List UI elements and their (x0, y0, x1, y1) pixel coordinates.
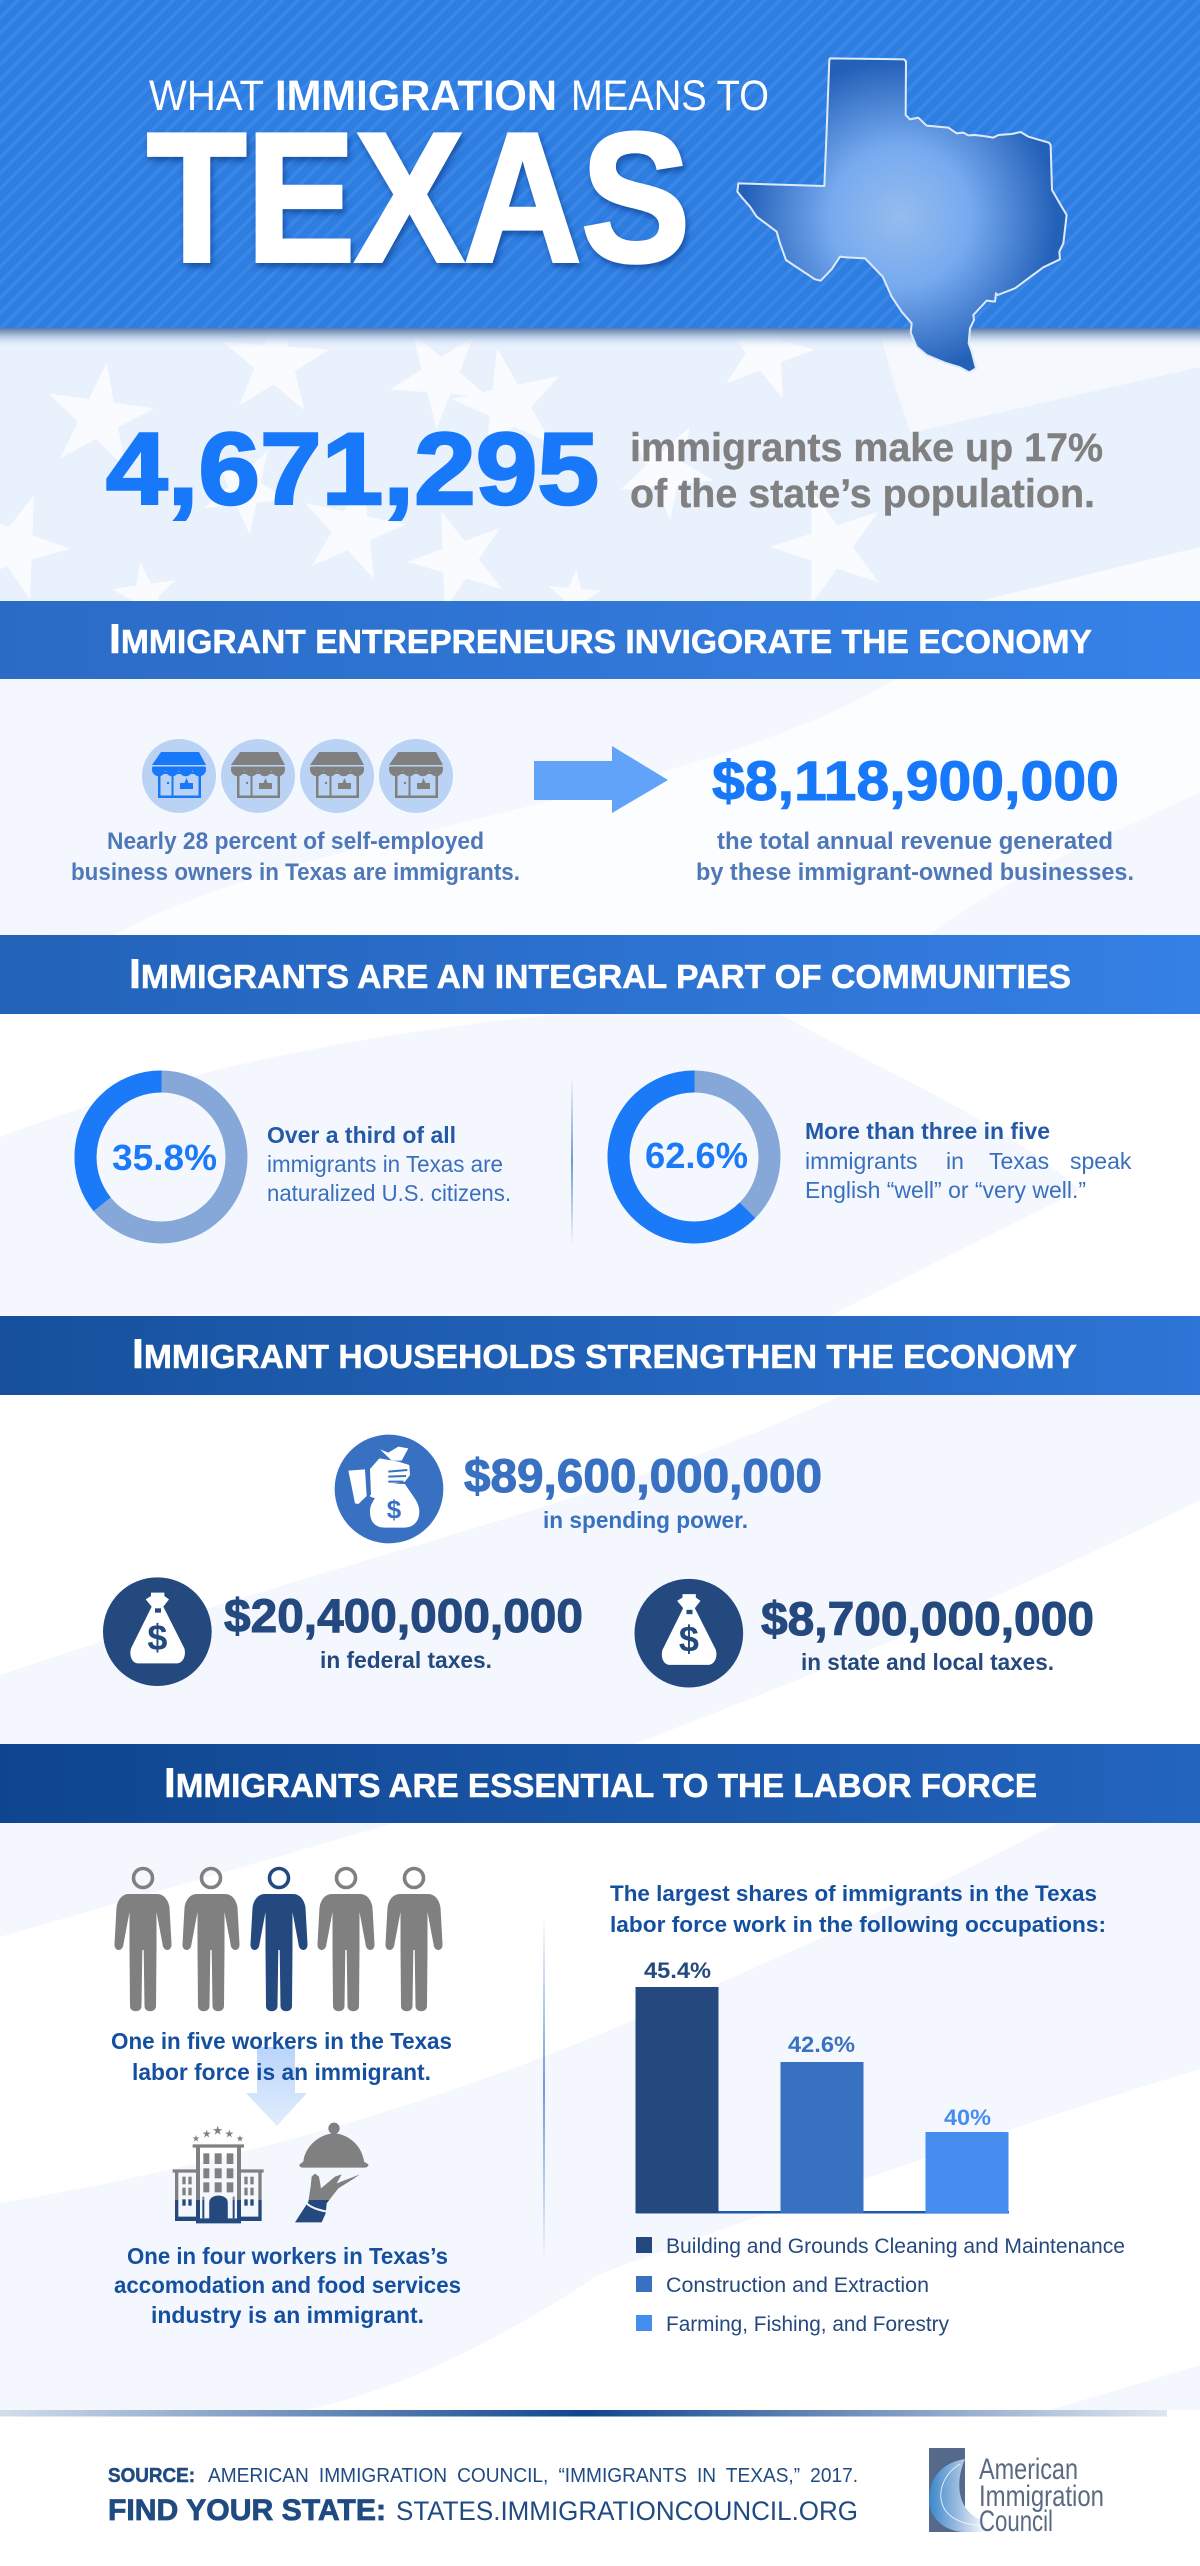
text: English proficiency: Texas (989, 1148, 1049, 1174)
stat: state and local taxes: in state and local taxes. (801, 1649, 1054, 1675)
bar: building and grounds 45.4%: 45.4% (644, 1958, 711, 1983)
icon: five workers (114, 1868, 443, 2011)
section 3 heading bar: IMMIGRANT HOUSEHOLDS STRENGTHEN THE ECONOMY (132, 1330, 1077, 1377)
chart legend: Building and Grounds Cleaning and Maintenance (666, 2235, 1125, 2258)
footer: source and link: SOURCE: (108, 2465, 195, 2487)
text: one in four workers: industry is an immigrant. (151, 2302, 424, 2328)
map: Texas state shape (737, 58, 1067, 372)
stat: federal taxes: $20,400,000,000 (224, 1589, 583, 1642)
text: naturalized citizens: Over a third of all (267, 1122, 456, 1148)
bar: construction 42.6%: 42.6% (788, 2032, 855, 2057)
text: one in four workers: accomodation and food services (114, 2272, 461, 2298)
stat: state and local taxes: $8,700,000,000 (761, 1592, 1094, 1645)
bar: farming 40%: 40% (944, 2105, 991, 2130)
text: English proficiency: speak (1070, 1148, 1132, 1174)
big number: 4,671,295 (106, 412, 599, 526)
text: self-employed owners: business owners in Texas are immigrants. (71, 859, 520, 886)
text: occupations heading: labor force work in the following occupations: (610, 1912, 1106, 1937)
bar: building and grounds 45.4% (636, 1958, 718, 2213)
icon: hotel (173, 2126, 264, 2223)
stat: total revenue (696, 749, 1134, 886)
logo: American Immigration Council: Council (979, 2505, 1053, 2538)
donut chart: 35.8%: 35.8% (112, 1137, 217, 1178)
title: what immigration means to: IMMIGRATION (275, 72, 557, 120)
population caption (630, 426, 1103, 516)
stat: total revenue: by these immigrant-owned businesses. (696, 859, 1134, 886)
logo: American Immigration Council (929, 2448, 1104, 2538)
text: English proficiency: immigrants (805, 1148, 917, 1174)
section 1 heading bar (0, 601, 1200, 679)
text: English proficiency: More than three in five (805, 1118, 1050, 1144)
chart legend: Construction and Extraction (666, 2274, 929, 2297)
bar: farming 40% (926, 2105, 1008, 2213)
logo: American Immigration Council: Immigration (979, 2480, 1104, 2513)
text: English proficiency: English “well” or “very well.” (805, 1177, 1086, 1203)
text: English proficiency: in (946, 1148, 964, 1174)
title: what immigration means to: WHAT (149, 72, 264, 120)
text: naturalized citizens (267, 1122, 511, 1206)
donut chart: 35.8% (86, 1082, 236, 1232)
text: English proficiency (805, 1118, 1132, 1203)
stat: spending power: $89,600,000,000 (464, 1449, 822, 1502)
title: what immigration means to: MEANS TO (571, 72, 769, 120)
section 3 heading bar (0, 1316, 1200, 1395)
section 2 heading bar: IMMIGRANTS ARE AN INTEGRAL PART OF COMMUNITIES (129, 950, 1071, 997)
chart legend (636, 2235, 1125, 2336)
text: naturalized citizens: immigrants in Texas are (267, 1151, 503, 1177)
title: Texas: TEXAS (147, 94, 690, 300)
stat: federal taxes: in federal taxes. (320, 1647, 492, 1673)
donut chart: 62.6%: 62.6% (645, 1135, 748, 1176)
bar chart: occupations (636, 1958, 1009, 2214)
header banner (0, 0, 1200, 328)
logo: American Immigration Council: American (979, 2453, 1078, 2486)
footer: source and link: AMERICAN IMMIGRATION COUNCIL, “IMMIGRANTS IN TEXAS,” 2017. (208, 2465, 858, 2487)
icon: cloche on hand (295, 2123, 368, 2222)
icon: money bag state and local (634, 1579, 743, 1687)
icon: money bag federal (103, 1577, 212, 1686)
population caption: immigrants make up 17% (630, 426, 1103, 470)
chart legend: Farming, Fishing, and Forestry (666, 2313, 949, 2336)
text: one in five workers (111, 2028, 452, 2085)
text: one in five workers: labor force is an immigrant. (132, 2059, 431, 2085)
stat: federal taxes (224, 1589, 583, 1673)
donut chart: 62.6% (618, 1082, 770, 1232)
icon: hand holding money bag: $ (387, 1495, 402, 1525)
section 1 heading bar: IMMIGRANT ENTREPRENEURS INVIGORATE THE ECONOMY (109, 615, 1092, 662)
population caption: of the state’s population. (630, 472, 1095, 516)
text: naturalized citizens: naturalized U.S. citizens. (267, 1180, 511, 1206)
text: one in four workers: One in four workers in Texas’s (127, 2243, 448, 2269)
stat: total revenue: $8,118,900,000 (712, 749, 1119, 812)
text: self-employed owners (71, 828, 520, 886)
text: occupations heading (610, 1881, 1106, 1937)
footer: source and link: STATES.IMMIGRATIONCOUNCIL.ORG (396, 2496, 858, 2526)
text: one in five workers: One in five workers in the Texas (111, 2028, 452, 2054)
stat: state and local taxes (761, 1592, 1094, 1675)
stat: spending power (464, 1449, 822, 1533)
footer: source and link (108, 2465, 858, 2527)
bar: construction 42.6% (780, 2032, 864, 2213)
title: what immigration means to (149, 72, 769, 120)
header bottom shadow (0, 328, 1200, 348)
text: occupations heading: The largest shares of immigrants in the Texas (610, 1881, 1097, 1906)
text: self-employed owners: Nearly 28 percent of self-employed (107, 828, 484, 855)
arrow: right (534, 746, 668, 813)
icon: hand holding money bag (335, 1435, 443, 1543)
section 2 heading bar (0, 935, 1200, 1014)
section 4 heading bar: IMMIGRANTS ARE ESSENTIAL TO THE LABOR FORCE (164, 1759, 1037, 1806)
stat: 4,671,295 immigrants (106, 412, 1103, 526)
icons: four storefronts (142, 739, 453, 813)
stat: total revenue: the total annual revenue generated (717, 828, 1113, 855)
arrow: down (246, 2047, 307, 2126)
stat: spending power: in spending power. (543, 1507, 748, 1533)
section 4 heading bar (0, 1744, 1200, 1823)
text: one in four workers (114, 2243, 461, 2328)
footer: source and link: FIND YOUR STATE: (108, 2494, 386, 2527)
